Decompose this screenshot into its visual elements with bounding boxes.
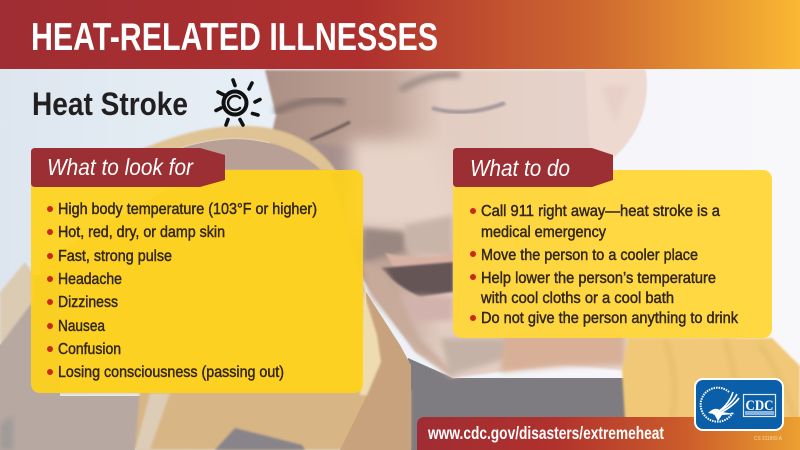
nostril shadow — [363, 228, 408, 262]
HHS seal with eagle — [701, 388, 739, 422]
tab: what to look for — [31, 148, 225, 187]
tab: what to look for: What to look for — [47, 154, 194, 180]
tab: what to do — [453, 148, 613, 187]
lower-left skin — [0, 275, 160, 450]
logo: HHS and CDC — [695, 379, 783, 430]
action list: medical emergency — [481, 224, 606, 241]
symptom list — [47, 201, 317, 381]
towel bottom — [135, 390, 411, 450]
towel under left panel — [40, 170, 370, 393]
left cream towel fold — [0, 262, 34, 345]
symptom list: Confusion — [58, 341, 121, 358]
symptom list: Hot, red, dry, or damp skin — [58, 224, 225, 241]
CDC mark: CDC — [746, 398, 774, 414]
symptom list: Nausea — [58, 318, 105, 335]
action list: Call 911 right away—heat stroke is a — [481, 203, 720, 220]
symptom list: Losing consciousness (passing out) — [58, 364, 284, 381]
cream towel edge — [360, 290, 381, 395]
heading: Heat Stroke: Heat Stroke — [32, 86, 188, 122]
ear — [585, 70, 646, 158]
symptom list: Dizziness — [58, 294, 118, 311]
action list: Move the person to a cooler place — [481, 247, 698, 264]
action list: Do not give the person anything to drink — [481, 310, 739, 327]
towel right — [622, 338, 800, 420]
jaw and neck — [440, 338, 530, 375]
towel arc — [135, 126, 337, 172]
title: HEAT-RELATED ILLNESSES — [31, 16, 438, 59]
footer bar with URL — [417, 417, 800, 450]
face — [265, 70, 760, 378]
icon: sun — [216, 80, 260, 125]
stubble — [405, 215, 453, 258]
action list: Help lower the person’s temperature — [481, 270, 716, 287]
brow and closed eye — [275, 100, 345, 112]
upper lip — [385, 252, 453, 268]
footer bar with URL: www.cdc.gov/disasters/extremeheat — [427, 423, 664, 443]
action list: with cool cloths or a cool bath — [480, 290, 674, 307]
symptom list: Fast, strong pulse — [58, 248, 172, 265]
top banner — [0, 0, 800, 69]
symptom list: Headache — [58, 271, 122, 288]
symptom list: High body temperature (103°F or higher) — [58, 201, 317, 218]
action list — [470, 203, 739, 327]
panel: what to look for — [31, 148, 363, 393]
shirt — [408, 358, 640, 450]
nose — [350, 140, 460, 232]
tab: what to do: What to do — [470, 155, 570, 181]
lower lip and chin — [400, 296, 453, 322]
panel: what to do — [453, 148, 772, 338]
open mouth — [381, 262, 453, 297]
publication code: CS 311869 A — [754, 436, 782, 442]
